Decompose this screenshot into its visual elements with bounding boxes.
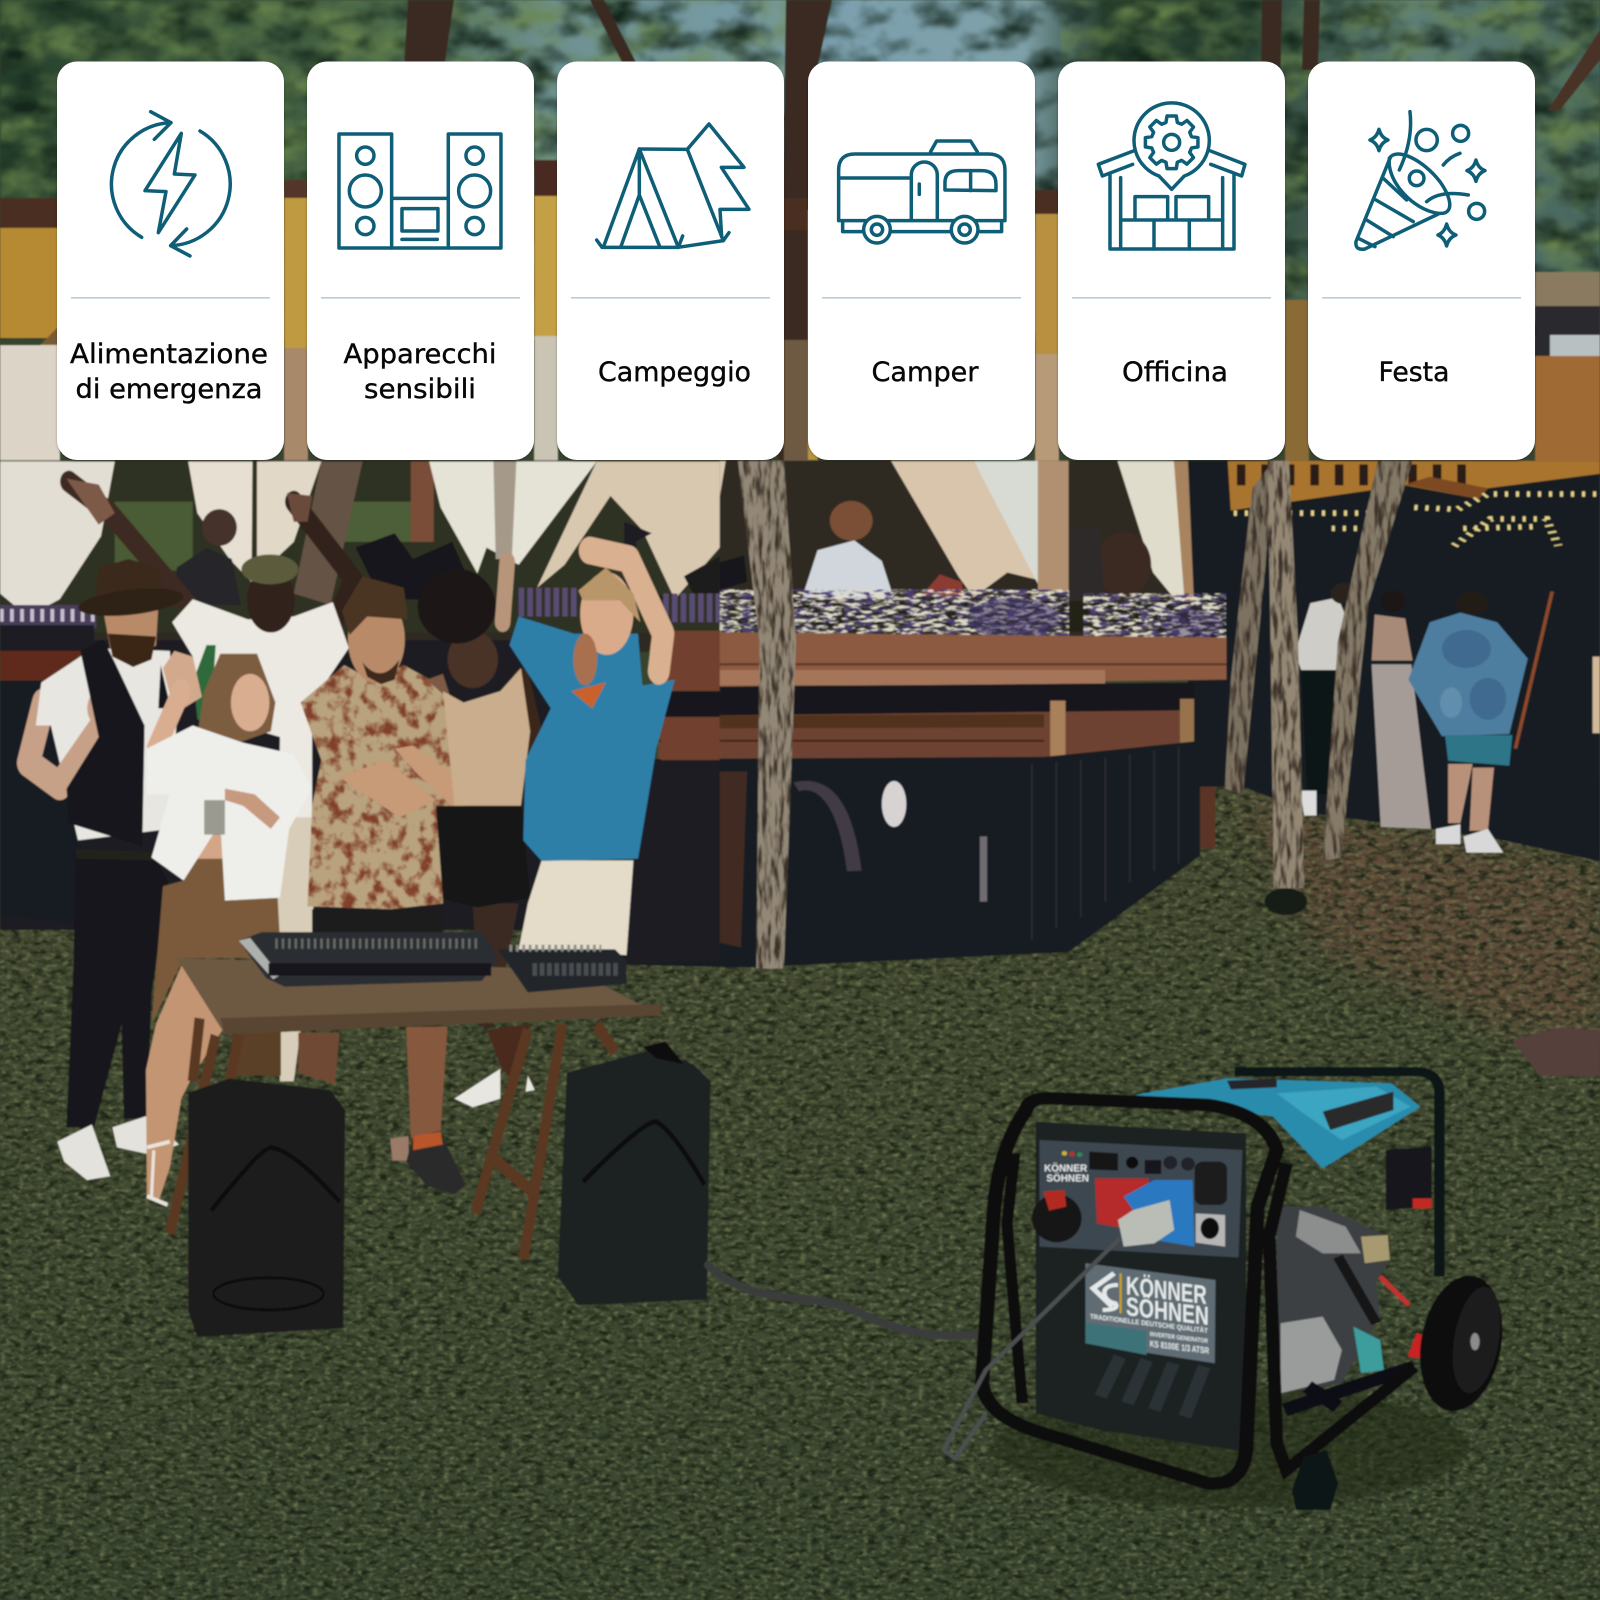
icon: hi-fi stereo [339,134,501,248]
power cable [708,1265,980,1335]
flower box [664,590,1226,643]
label second line: sensibili [364,374,476,405]
card: Festa [1308,62,1535,460]
grey plug [1118,1200,1174,1247]
wheel [1411,1271,1512,1416]
card: Apparecchi sensibili [307,62,534,460]
blue socket [1124,1180,1194,1247]
icon: party popper [1356,112,1485,249]
pavilion walls seen between the cards [0,160,1600,466]
card: Camper [808,62,1035,460]
card: Campeggio [557,62,784,460]
planter [676,632,1226,687]
balcony railing [1228,461,1600,510]
stepping stone [1512,1028,1600,1076]
dark fence [616,741,1200,967]
black round socket [1032,1194,1082,1242]
label second line: di emergenza [76,374,262,405]
curtains [640,461,726,595]
lawn [0,780,1600,1600]
engine [1277,1207,1388,1393]
man with hat and vest [28,559,202,1180]
icon: power bolt with arrows [111,112,230,256]
divider rule [822,297,1021,299]
divider rule [321,297,520,299]
man in blue polo [503,550,675,955]
woman with white blouse [146,654,312,1205]
label: Alimentazione [70,339,268,370]
card: Officina [1058,62,1285,460]
label: Camper [872,357,979,388]
logo plate: TRADITIONELLE DEUTSCHE QUALITÄT [1090,1312,1208,1335]
speaker left [188,1079,345,1337]
man in patterned shirt [298,576,477,1194]
speaker right [558,1041,711,1305]
output cable [944,1238,1120,1458]
vents [1101,1357,1204,1417]
switch box [1386,1147,1432,1210]
small mixer [498,949,627,992]
main housing [1036,1122,1246,1452]
table top [177,958,661,1034]
green bottle [194,645,216,720]
generator: SÖHNEN [1046,1174,1089,1185]
dancer in white shirt with raised arms [67,479,353,1081]
seated guests [802,540,894,599]
divider rule [571,297,770,299]
black outlet [1194,1162,1227,1205]
label: Campeggio [598,357,751,388]
rubber foot [1292,1450,1338,1510]
generator: KÖNNER [1044,1164,1087,1175]
ground shadow [994,1387,1468,1507]
dark guests [174,548,241,605]
divider rule [71,297,270,299]
guests by the bar [1295,597,1353,674]
logo plate: SÖHNEN [1126,1292,1209,1332]
label: Officina [1122,357,1228,388]
logo plate: INVERTER GENERATOR [1150,1331,1208,1345]
DJ group: six dancers [28,479,675,1205]
rear frame [1235,1072,1439,1277]
label: Festa [1378,357,1450,388]
dark wall behind the dancers [0,640,640,930]
generator [944,1072,1512,1510]
icon: camper van [839,141,1005,243]
pavilion, planter and background guests [0,461,1600,969]
red socket [1095,1178,1149,1227]
front tube frame [982,1098,1277,1484]
panel display and switches [1089,1152,1118,1171]
string lights [1234,494,1598,546]
icon: workshop with gear [1098,103,1245,249]
icon: tent and tree [597,124,749,247]
divider rule [1322,297,1521,299]
logo plate [1085,1263,1216,1363]
woman with tan top [418,569,588,1107]
rear chassis [1284,1367,1415,1410]
selector [1196,1213,1225,1247]
tree trunks [738,461,796,969]
control panel [1040,1140,1242,1257]
left background and curtains [0,460,720,964]
card: Alimentazione di emergenza [57,62,284,460]
logo plate: KS 8100E 1/3 ATSR [1150,1338,1209,1356]
trees and sky [0,0,1600,470]
fuel tank [1135,1078,1420,1168]
DJ table with mixers [170,932,661,1259]
table legs [170,1018,615,1259]
logo plate: KÖNNER [1126,1271,1207,1311]
divider rule [1072,297,1271,299]
label: Apparecchi [344,339,496,370]
main mixer [239,932,498,987]
